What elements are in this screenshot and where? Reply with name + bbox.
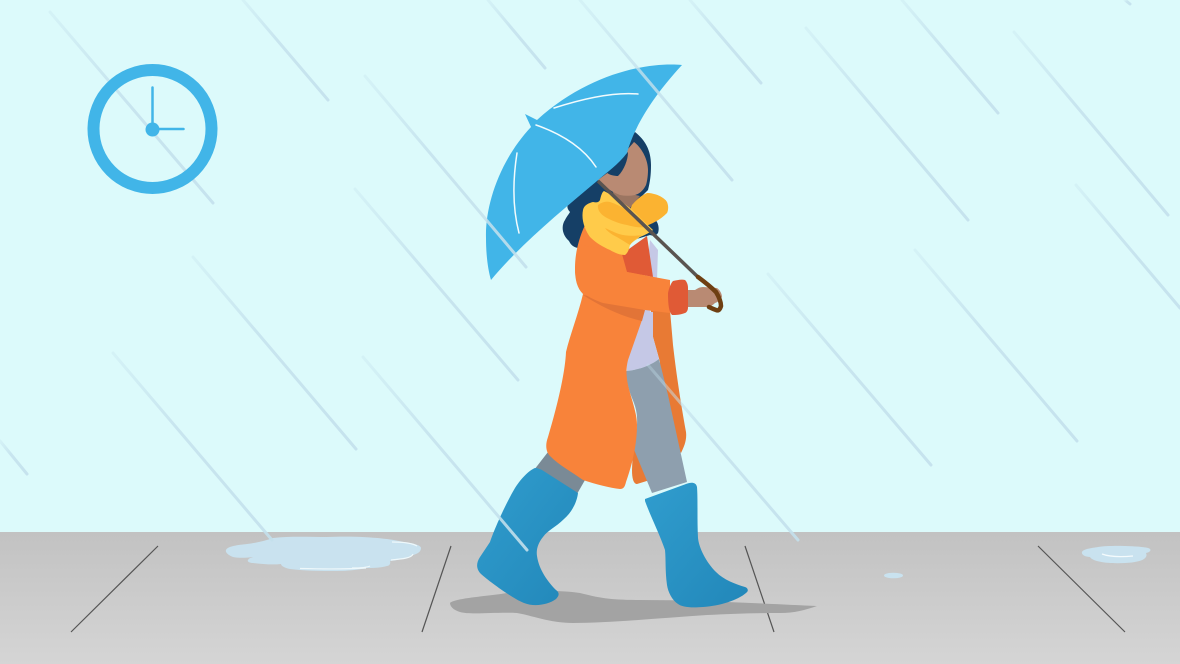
large puddle: [226, 537, 421, 571]
hair back: [563, 132, 659, 250]
umbrella: [486, 65, 721, 310]
front boot: [645, 483, 748, 607]
umbrella canopy: [486, 65, 682, 280]
coat tail back: [632, 445, 650, 484]
neck: [612, 190, 640, 208]
woman figure: [477, 132, 748, 607]
hair strand: [606, 152, 628, 176]
cuff: [668, 280, 688, 315]
umbrella ribs: [514, 94, 638, 233]
back leg: [534, 452, 585, 494]
coat lapel: [622, 236, 653, 277]
scarf front: [582, 191, 653, 255]
face: [598, 142, 648, 196]
small puddle right: [1082, 546, 1150, 563]
tiny puddle: [884, 573, 903, 578]
front leg: [626, 359, 687, 493]
scarf shade lower: [605, 228, 642, 245]
scarf shade: [598, 202, 647, 227]
coat main body: [546, 225, 645, 489]
shirt: [627, 240, 659, 371]
scarf back fold: [625, 193, 668, 227]
sidewalk: [0, 532, 1180, 664]
back boot: [477, 468, 578, 605]
hand: [688, 287, 722, 307]
umbrella handle: [698, 277, 721, 310]
arm shadow: [583, 295, 645, 321]
scarf: [582, 191, 668, 255]
clock icon: [94, 70, 212, 188]
ground shadow: [450, 591, 817, 623]
umbrella pole: [598, 181, 699, 278]
coat arm: [575, 245, 670, 313]
back coat panel: [650, 300, 686, 453]
coat fold mark: [602, 254, 608, 269]
